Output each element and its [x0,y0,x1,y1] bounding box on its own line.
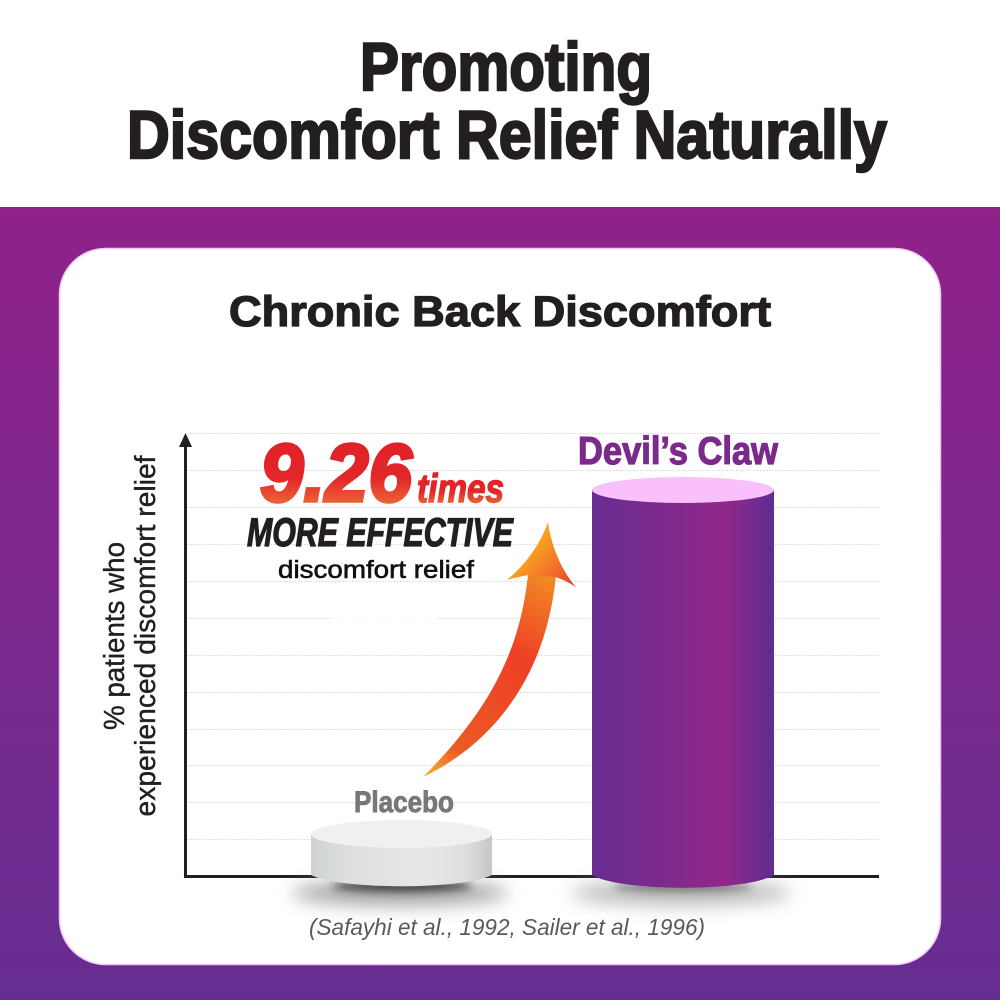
title: Promoting [360,29,652,105]
y axis label: % patients who [99,542,131,730]
placebo bar [292,786,508,905]
citation: (Safayhi et al., 1992, Sailer et al., 1996) [309,914,705,940]
callout: 9.26 times more effective: MORE EFFECTIVE [247,511,514,555]
arrow [423,522,576,777]
y axis label: experienced discomfort relief [130,455,162,816]
chart heading: Chronic Back Discomfort [229,288,771,336]
devil's claw bar [571,430,791,905]
callout: 9.26 times more effective: discomfort relief [278,556,474,584]
devil's claw bar: Devil’s Claw [578,430,779,473]
title: Discomfort Relief Naturally [127,97,887,173]
callout: 9.26 times more effective: 9.26 [260,428,413,519]
title [127,29,887,173]
callout: 9.26 times more effective: times [417,467,504,511]
chart gridlines and axes [179,433,880,878]
y axis label [99,455,162,816]
placebo bar: Placebo [354,786,454,819]
white card panel [60,248,940,964]
purple background panel [0,207,1000,1000]
callout: 9.26 times more effective [247,428,514,584]
